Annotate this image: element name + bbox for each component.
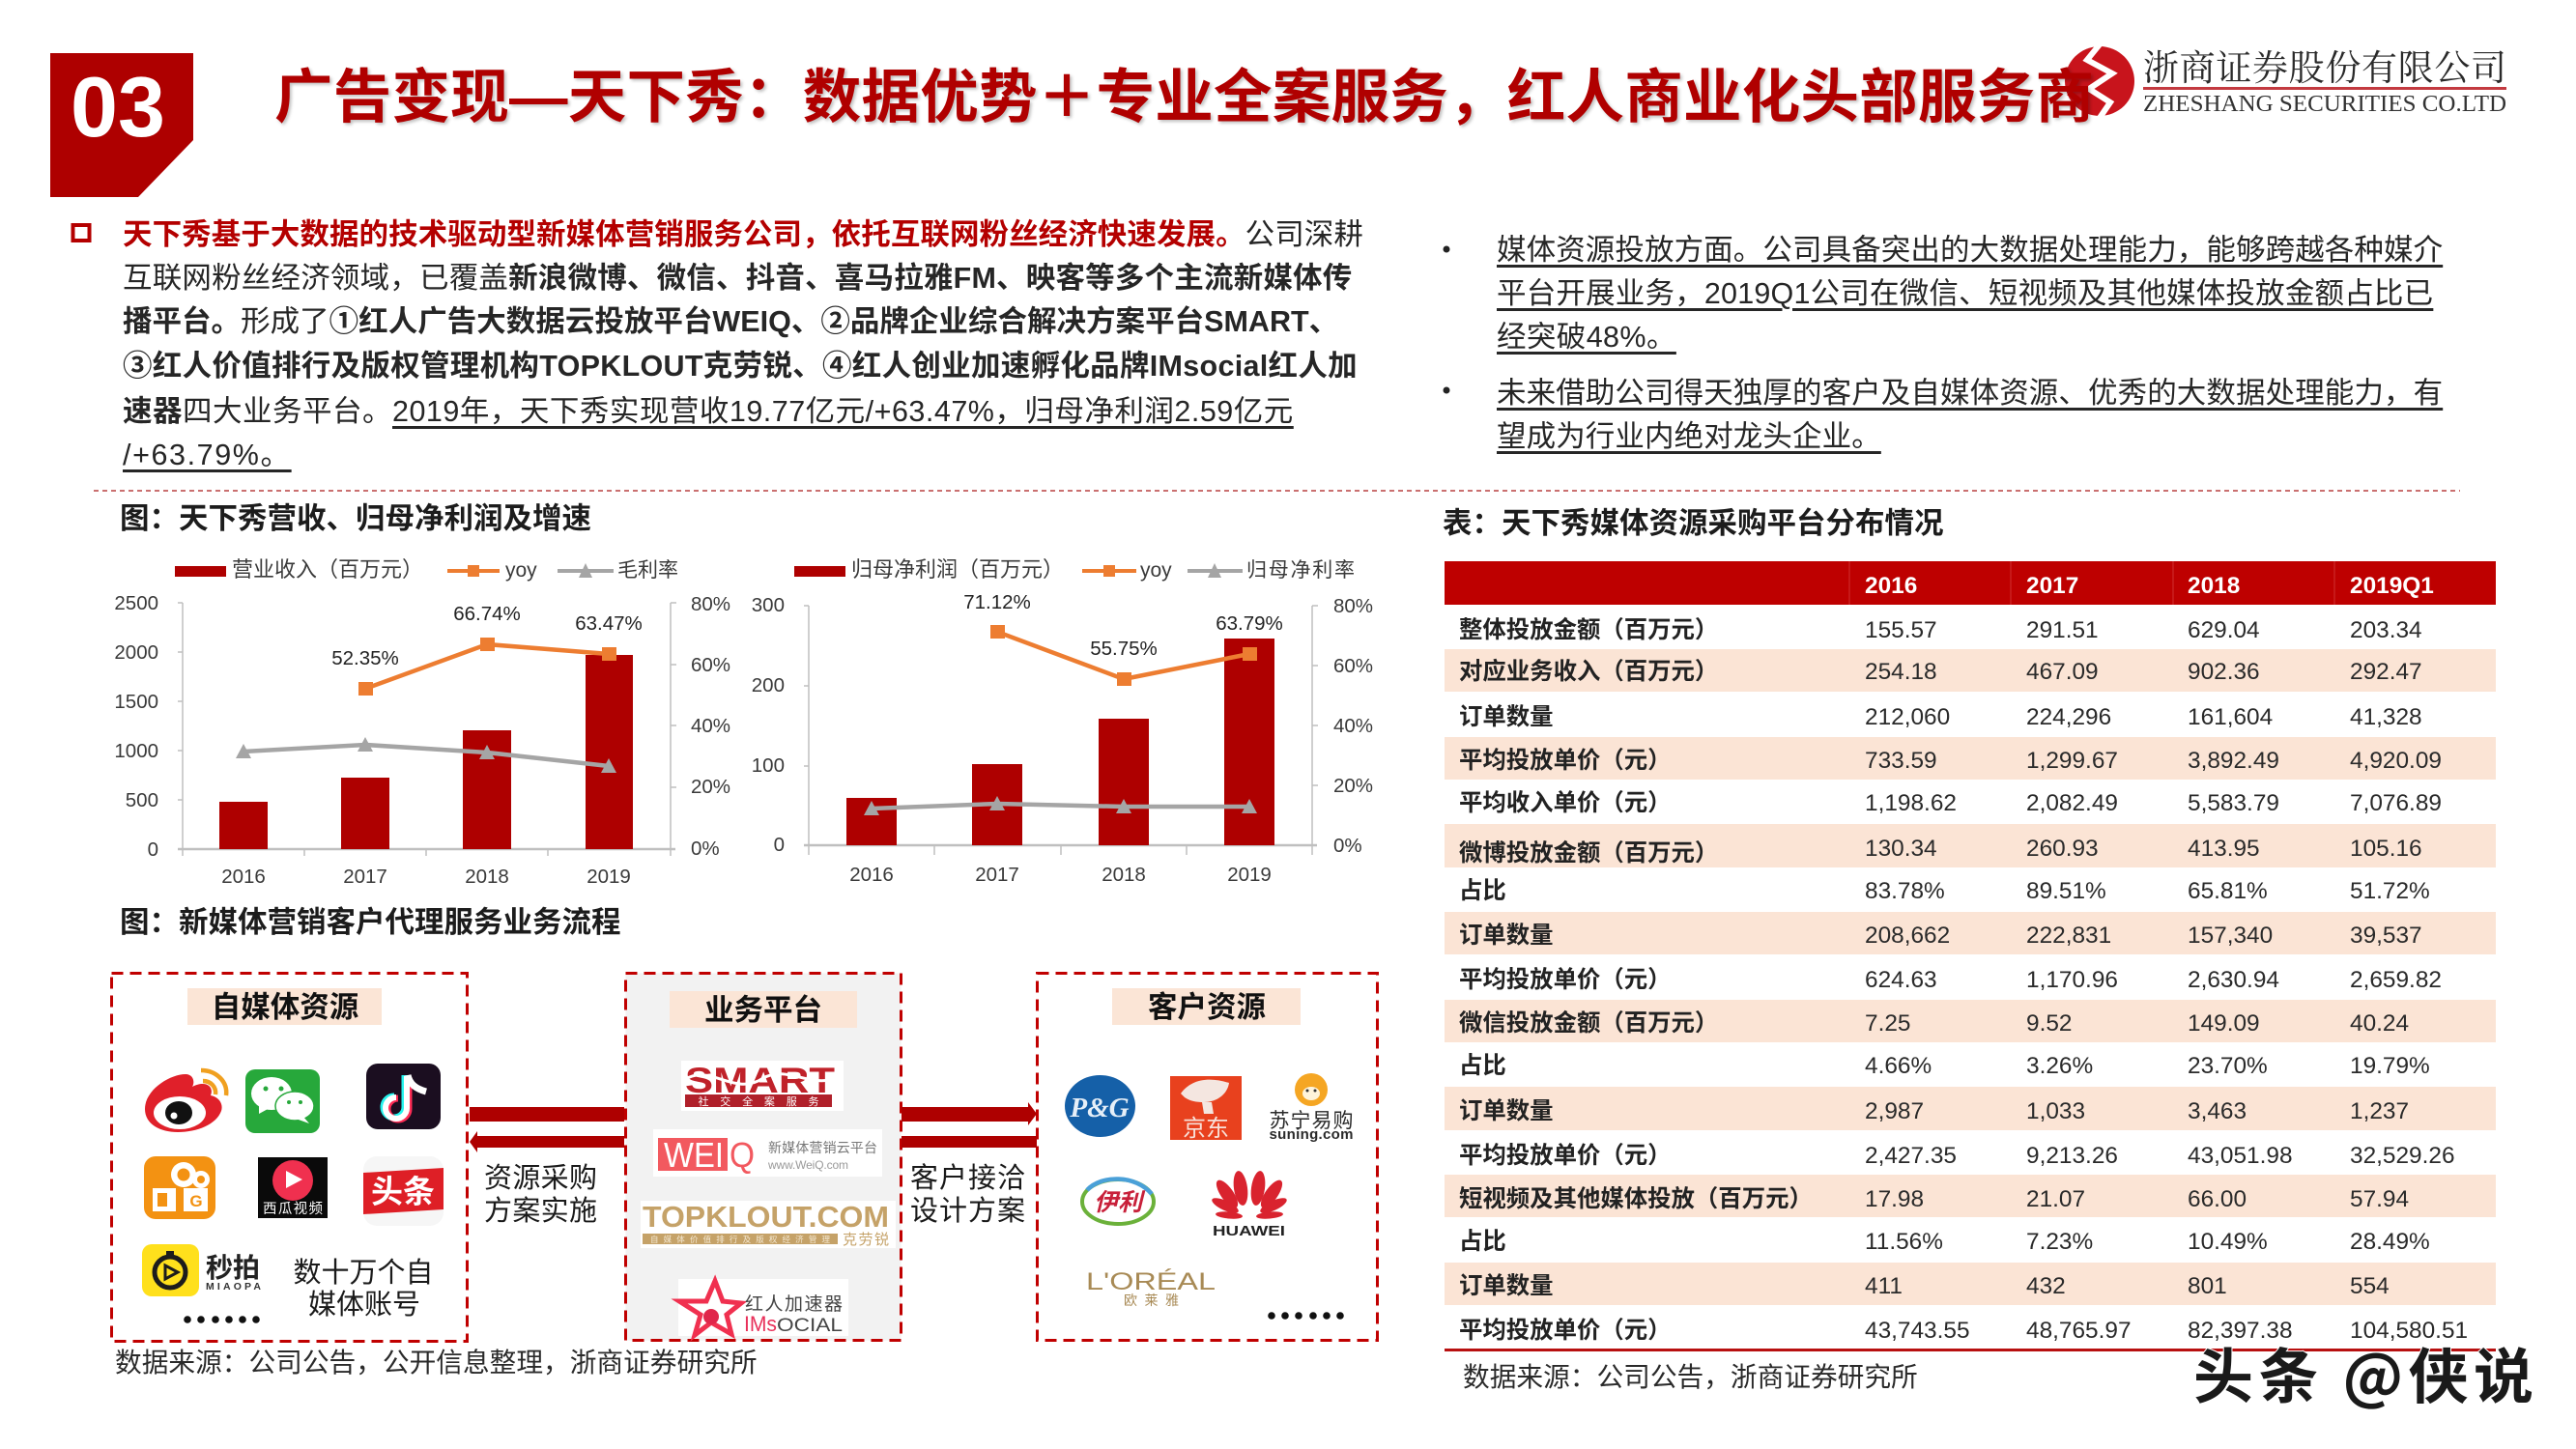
title: 广告变现—天下秀：数据优势＋专业全案服务，红人商业化头部服务商 (274, 64, 2094, 129)
label: client contact: 设计方案 (910, 1195, 1025, 1227)
row: wechat share: 19.79% (2350, 1053, 2430, 1079)
panel: self-media resources (112, 974, 468, 1341)
logo: TOPKLOUT: 克劳锐 (843, 1232, 889, 1248)
row: short video share: 7.23% (2026, 1229, 2093, 1255)
row: orders: 224,296 (2026, 704, 2111, 730)
row: short video share (1459, 1229, 2430, 1255)
text block: company overview: 互联网粉丝经济领域，已覆盖新浪微博、微信、抖音、喜马拉雅FM、映客等多个主流新媒体传 (123, 262, 1352, 295)
logo: P&G (1065, 1075, 1135, 1137)
text: account count (293, 1257, 434, 1321)
arrow: client contact (902, 1136, 1037, 1148)
company logo: 浙商证券股份有限公司 (2143, 48, 2506, 89)
row: short video spend: 57.94 (2350, 1186, 2409, 1212)
text block: company overview: ③红人价值排行及版权管理机构TOPKLOUT克劳锐、④红人创业加速孵化品牌IMsocial红人加 (123, 350, 1358, 383)
row: average spend: 3,892.49 (2188, 748, 2279, 774)
bullet dot two (1444, 386, 1449, 394)
table bottom rule (1445, 1349, 2496, 1351)
logo: SMART: SMART (685, 1061, 835, 1100)
row: wechat spend: 149.09 (2188, 1010, 2260, 1037)
row: short video share: 占比 (1459, 1229, 1506, 1255)
row: wechat share: 3.26% (2026, 1053, 2093, 1079)
table heading: 表：天下秀媒体资源采购平台分布情况 (1443, 506, 1944, 540)
axis and data labels right: 2018 (1102, 864, 1146, 886)
row: short video spend: 短视频及其他媒体投放（百万元） (1459, 1186, 1813, 1212)
source note left: 数据来源：公司公告，公开信息整理，浙商证券研究所 (115, 1348, 758, 1378)
logo: WEIQ (653, 1129, 882, 1177)
chart legend right (794, 557, 1355, 582)
gross margin line (236, 737, 616, 773)
table header (1445, 561, 2496, 605)
flow diagram (112, 974, 1378, 1341)
row: wechat spend: 微信投放金额（百万元） (1459, 1009, 1718, 1037)
dots left (184, 1316, 260, 1323)
icon: xigua video: 西瓜视频 (263, 1201, 323, 1217)
chart legend left: 毛利率 (617, 559, 678, 582)
logo: suning: suning.com (1270, 1126, 1353, 1143)
icon: tiktok (366, 1064, 441, 1129)
axis and data labels: 2500 (114, 592, 158, 614)
row: weibo orders: 157,340 (2188, 923, 2273, 949)
chart legend right: 归母净利润（百万元） (851, 557, 1064, 582)
row: weibo share: 占比 (1459, 878, 1506, 904)
icon: toutiao (363, 1156, 444, 1226)
icon: miaopai: 秒拍 (206, 1253, 260, 1283)
row: short video spend (1459, 1186, 2409, 1212)
row: short video orders: 801 (2188, 1273, 2227, 1299)
axis and data labels right: 2016 (849, 864, 894, 886)
text block: company overview: 播平台。形成了①红人广告大数据云投放平台WEIQ、②品牌企业综合解决方案平台SMART、 (123, 305, 1338, 338)
logo: P&G: P&G (1069, 1093, 1130, 1123)
row: short video average: 43,743.55 (1865, 1318, 1970, 1344)
label: client contact (910, 1162, 1025, 1227)
row: weibo orders (1459, 923, 2422, 949)
row: short video share: 28.49% (2350, 1229, 2430, 1255)
row: orders (1459, 704, 2422, 730)
axis and data labels right: 2019 (1227, 864, 1272, 886)
logo: IMsocial: 红人加速器 (745, 1293, 843, 1315)
row: weibo orders: 39,537 (2350, 923, 2422, 949)
axis and data labels: 2000 (114, 641, 158, 664)
text block: media spend analysis: 平台开展业务，2019Q1公司在微信、短视频及其他媒体投放金额占比已 (1497, 277, 2433, 310)
yoy line (358, 638, 616, 696)
axis and data labels: 1000 (114, 740, 158, 762)
logo: yili: 伊利 (1094, 1189, 1146, 1216)
chart: revenue, yoy and gross margin (114, 557, 730, 888)
row: wechat average: 2,427.35 (1865, 1143, 1957, 1169)
row: short video share: 11.56% (1865, 1229, 1943, 1255)
chart legend right: yoy (1140, 559, 1172, 582)
logo: WEIQ: www.WeiQ.com (767, 1158, 848, 1172)
row: average revenue: 平均收入单价（元） (1459, 790, 1672, 816)
icon: xigua video (258, 1157, 328, 1218)
row: short video spend: 66.00 (2188, 1186, 2247, 1212)
axis and data labels right: 0 (774, 834, 785, 856)
label: resource procurement: 方案实施 (484, 1195, 597, 1227)
row: weibo share: 51.72% (2350, 878, 2430, 904)
axis and data labels right: 200 (752, 674, 785, 696)
text block: company overview: /+63.79%。 (123, 439, 292, 471)
panel: self-media resources: 自媒体资源 (212, 991, 358, 1024)
row: weibo average: 平均投放单价（元） (1459, 967, 1672, 993)
label: resource procurement: 资源采购 (484, 1162, 597, 1194)
logo: huawei: HUAWEI (1213, 1223, 1285, 1239)
logo: TOPKLOUT: 自媒体价值排行及版权经济管理 (650, 1235, 830, 1244)
text block: media spend analysis: 媒体资源投放方面。公司具备突出的大数据处理能力，能够跨越各种媒介 (1497, 234, 2443, 267)
logo: SMART: 社交全案服务 (698, 1094, 819, 1108)
dots right (1268, 1312, 1344, 1320)
row: wechat average (1459, 1143, 2455, 1169)
chart axes right (804, 606, 1318, 855)
row: wechat average: 9,213.26 (2026, 1143, 2118, 1169)
axis and data labels: 80% (691, 593, 730, 615)
row: revenue: 对应业务收入（百万元） (1459, 659, 1718, 685)
axis and data labels right: 0% (1333, 835, 1362, 857)
axis and data labels: 1500 (114, 691, 158, 713)
table header: 2016 (1865, 573, 1917, 599)
row: short video orders: 411 (1865, 1273, 1903, 1299)
row: wechat spend: 7.25 (1865, 1010, 1910, 1037)
axis and data labels right: 71.12% (963, 591, 1031, 613)
logo: JD: 京东 (1183, 1116, 1229, 1142)
row: short video orders (1459, 1273, 2390, 1299)
chart legend left: yoy (505, 559, 537, 582)
row: average revenue (1459, 790, 2442, 816)
row: average revenue: 7,076.89 (2350, 790, 2442, 816)
axis and data labels right: 300 (752, 594, 785, 616)
row: average revenue: 5,583.79 (2188, 790, 2279, 816)
axis and data labels: 52.35% (331, 647, 399, 669)
text: account count: 媒体账号 (308, 1289, 420, 1321)
axis and data labels: 63.47% (575, 612, 643, 635)
icon: miaopai (142, 1244, 261, 1296)
source note right: 数据来源：公司公告，浙商证券研究所 (1463, 1362, 1918, 1392)
row: weibo average: 1,170.96 (2026, 967, 2118, 993)
row: average spend (1459, 748, 2442, 774)
text block: company overview: 天下秀基于大数据的技术驱动型新媒体营销服务公司，依托互联网粉丝经济快速发展。公司深耕 (123, 218, 1363, 251)
row: weibo average: 2,630.94 (2188, 967, 2279, 993)
row: average spend: 733.59 (1865, 748, 1937, 774)
axis and data labels right: 40% (1333, 715, 1373, 737)
bullet dot one (1444, 245, 1449, 253)
icon: toutiao: 头条 (371, 1174, 435, 1209)
row: total spend (1459, 616, 2422, 643)
text block: company overview: 速器四大业务平台。2019年，天下秀实现营收19.77亿元/+63.47%，归母净利润2.59亿元 (123, 395, 1294, 428)
row: wechat share: 占比 (1459, 1053, 1506, 1079)
row: average revenue: 2,082.49 (2026, 790, 2118, 816)
row: weibo spend: 130.34 (1865, 836, 1937, 862)
table: media resource procurement (1445, 561, 2496, 1351)
row: wechat orders: 订单数量 (1459, 1098, 1554, 1124)
logo: IMsocial: IMs (744, 1312, 777, 1336)
row: short video spend: 21.07 (2026, 1186, 2085, 1212)
row: wechat orders: 1,237 (2350, 1098, 2409, 1124)
row: average spend: 1,299.67 (2026, 748, 2118, 774)
row: weibo spend: 微博投放金额（百万元） (1459, 839, 1718, 867)
profit bars (846, 639, 1274, 845)
logo: loreal: 欧莱雅 (1124, 1293, 1179, 1308)
logo: IMsocial: OCIAL (777, 1316, 843, 1336)
company logo (2065, 44, 2506, 118)
row: weibo share: 65.81% (2188, 878, 2268, 904)
axis and data labels: 500 (126, 789, 158, 811)
table header: 2019Q1 (2350, 573, 2434, 599)
row: revenue: 902.36 (2188, 659, 2260, 685)
row: short video average (1459, 1318, 2468, 1344)
logo: WEIQ: WEI (664, 1135, 724, 1175)
flow heading: 图：新媒体营销客户代理服务业务流程 (120, 906, 620, 939)
row: orders: 41,328 (2350, 704, 2422, 730)
arrow: client solution (902, 1102, 1037, 1125)
row: weibo orders: 订单数量 (1459, 923, 1554, 949)
axis and data labels: 0 (148, 838, 158, 861)
axis and data labels: 2016 (221, 866, 266, 888)
row: total spend: 155.57 (1865, 617, 1937, 643)
row: short video orders: 订单数量 (1459, 1273, 1554, 1299)
row: wechat spend (1459, 1009, 2409, 1037)
row: wechat spend: 9.52 (2026, 1010, 2072, 1037)
axis and data labels right (752, 591, 1373, 886)
text block: media spend analysis: 未来借助公司得天独厚的客户及自媒体资源、优秀的大数据处理能力，有 (1497, 377, 2443, 410)
row: orders: 212,060 (1865, 704, 1950, 730)
text: account count: 数十万个自 (293, 1257, 434, 1289)
chart heading: revenue and profit: 图：天下秀营收、归母净利润及增速 (120, 502, 591, 535)
row: wechat share: 4.66% (1865, 1053, 1932, 1079)
icon: wechat (245, 1069, 320, 1133)
chart legend left (175, 557, 678, 582)
logo: TOPKLOUT (641, 1200, 896, 1248)
row: short video spend: 17.98 (1865, 1186, 1924, 1212)
axis and data labels: 60% (691, 654, 730, 676)
logo: IMsocial (678, 1279, 848, 1336)
panel: client resources (1038, 974, 1378, 1341)
row: wechat average: 43,051.98 (2188, 1143, 2293, 1169)
axis and data labels right: 80% (1333, 595, 1373, 617)
panel: business platforms: 业务平台 (704, 993, 822, 1027)
axis and data labels: 2017 (343, 866, 387, 888)
bullet square (73, 225, 89, 241)
row: orders: 订单数量 (1459, 704, 1554, 730)
row: weibo share: 83.78% (1865, 878, 1945, 904)
table header: 2018 (2188, 573, 2240, 599)
axis and data labels: 2019 (587, 866, 631, 888)
axis and data labels right: 20% (1333, 775, 1373, 797)
row: short video orders: 432 (2026, 1273, 2066, 1299)
net margin line (864, 796, 1257, 815)
row: short video average: 48,765.97 (2026, 1318, 2132, 1344)
logo: WEIQ: 新媒体营销云平台 (768, 1140, 877, 1155)
axis and data labels: 20% (691, 776, 730, 798)
logo: WEIQ: Q (730, 1135, 755, 1175)
panel: client resources: 客户资源 (1148, 991, 1266, 1024)
yoy line right (990, 625, 1257, 686)
row: short video average: 104,580.51 (2350, 1318, 2468, 1344)
text block: company overview (123, 218, 1363, 472)
chart legend left: 营业收入（百万元） (232, 557, 423, 582)
row: total spend: 203.34 (2350, 617, 2422, 643)
logo: SMART (681, 1061, 844, 1111)
row: wechat average: 平均投放单价（元） (1459, 1143, 1672, 1169)
row: weibo average: 624.63 (1865, 967, 1937, 993)
axis and data labels right: 2017 (975, 864, 1019, 886)
row: weibo orders: 208,662 (1865, 923, 1950, 949)
icon: kuaishou: G (189, 1192, 203, 1210)
row: weibo orders: 222,831 (2026, 923, 2111, 949)
row: total spend: 291.51 (2026, 617, 2099, 643)
text block: media spend analysis: 经突破48%。 (1497, 321, 1676, 354)
axis and data labels: 0% (691, 838, 720, 860)
row: total spend: 整体投放金额（百万元） (1459, 616, 1718, 643)
row: short video orders: 554 (2350, 1273, 2390, 1299)
row: total spend: 629.04 (2188, 617, 2260, 643)
row: orders: 161,604 (2188, 704, 2273, 730)
icon: weibo (145, 1070, 226, 1132)
row: short video share: 10.49% (2188, 1229, 2268, 1255)
row: weibo spend: 260.93 (2026, 836, 2099, 862)
row: revenue (1459, 659, 2422, 685)
row: average revenue: 1,198.62 (1865, 790, 1957, 816)
row: weibo share (1459, 878, 2430, 904)
chart legend right: 归母净利率 (1246, 559, 1355, 582)
row: average spend: 平均投放单价（元） (1459, 748, 1672, 774)
row: revenue: 292.47 (2350, 659, 2422, 685)
section number badge (50, 53, 193, 197)
logo: loreal: L'ORÉAL (1086, 1267, 1216, 1295)
row: weibo spend (1459, 836, 2422, 867)
axis and data labels: 2018 (465, 866, 509, 888)
watermark: 头条 @侠说 (2193, 1328, 2533, 1415)
panel: business platforms (626, 974, 901, 1341)
table row bands (1445, 649, 2496, 1305)
label: client contact: 客户接洽 (910, 1162, 1025, 1194)
axis and data labels right: 63.79% (1216, 612, 1283, 635)
row: weibo average: 2,659.82 (2350, 967, 2442, 993)
table header: 2017 (2026, 573, 2078, 599)
axis and data labels: 40% (691, 715, 730, 737)
row: wechat share (1459, 1053, 2430, 1079)
row: wechat orders: 3,463 (2188, 1098, 2247, 1124)
company logo: ZHESHANG SECURITIES CO.LTD (2143, 92, 2506, 117)
logo: JD (1170, 1076, 1242, 1142)
row: revenue: 254.18 (1865, 659, 1937, 685)
axis and data labels: 66.74% (453, 603, 521, 625)
chart: net profit, yoy and net margin (752, 557, 1373, 886)
row: wechat orders (1459, 1098, 2409, 1124)
section number badge: 03 (71, 59, 165, 155)
row: weibo average (1459, 967, 2442, 993)
axis and data labels right: 55.75% (1090, 638, 1158, 660)
row: short video average: 平均投放单价（元） (1459, 1318, 1672, 1344)
row: weibo spend: 105.16 (2350, 836, 2422, 862)
row: weibo share: 89.51% (2026, 878, 2106, 904)
row: average spend: 4,920.09 (2350, 748, 2442, 774)
logo: loreal (1086, 1267, 1216, 1308)
row: wechat orders: 2,987 (1865, 1098, 1924, 1124)
row: short video average: 82,397.38 (2188, 1318, 2293, 1344)
text block: media spend analysis: 望成为行业内绝对龙头企业。 (1497, 420, 1881, 453)
row: wechat spend: 40.24 (2350, 1010, 2409, 1037)
arrow: resource implementation (470, 1131, 624, 1152)
row: wechat orders: 1,033 (2026, 1098, 2085, 1124)
logo: suning (1270, 1073, 1353, 1143)
label: resource procurement (484, 1162, 597, 1227)
icon: kuaishou (144, 1156, 215, 1219)
icon: miaopai: MIAOPA (206, 1281, 261, 1293)
row: wechat average: 32,529.26 (2350, 1143, 2455, 1169)
logo: suning: 苏宁易购 (1270, 1110, 1353, 1132)
row: revenue: 467.09 (2026, 659, 2099, 685)
revenue bars (219, 655, 633, 849)
axis and data labels right: 100 (752, 754, 785, 777)
axis and data labels (114, 592, 730, 888)
chart axes left (178, 603, 676, 856)
text block: media spend analysis (1497, 234, 2443, 454)
row: weibo spend: 413.95 (2188, 836, 2260, 862)
arrow: resource purchase (470, 1107, 624, 1122)
row: wechat share: 23.70% (2188, 1053, 2268, 1079)
logo: yili (1082, 1179, 1154, 1224)
logo: huawei (1210, 1170, 1289, 1239)
axis and data labels right: 60% (1333, 655, 1373, 677)
logo: TOPKLOUT: TOPKLOUT.COM (643, 1200, 889, 1234)
